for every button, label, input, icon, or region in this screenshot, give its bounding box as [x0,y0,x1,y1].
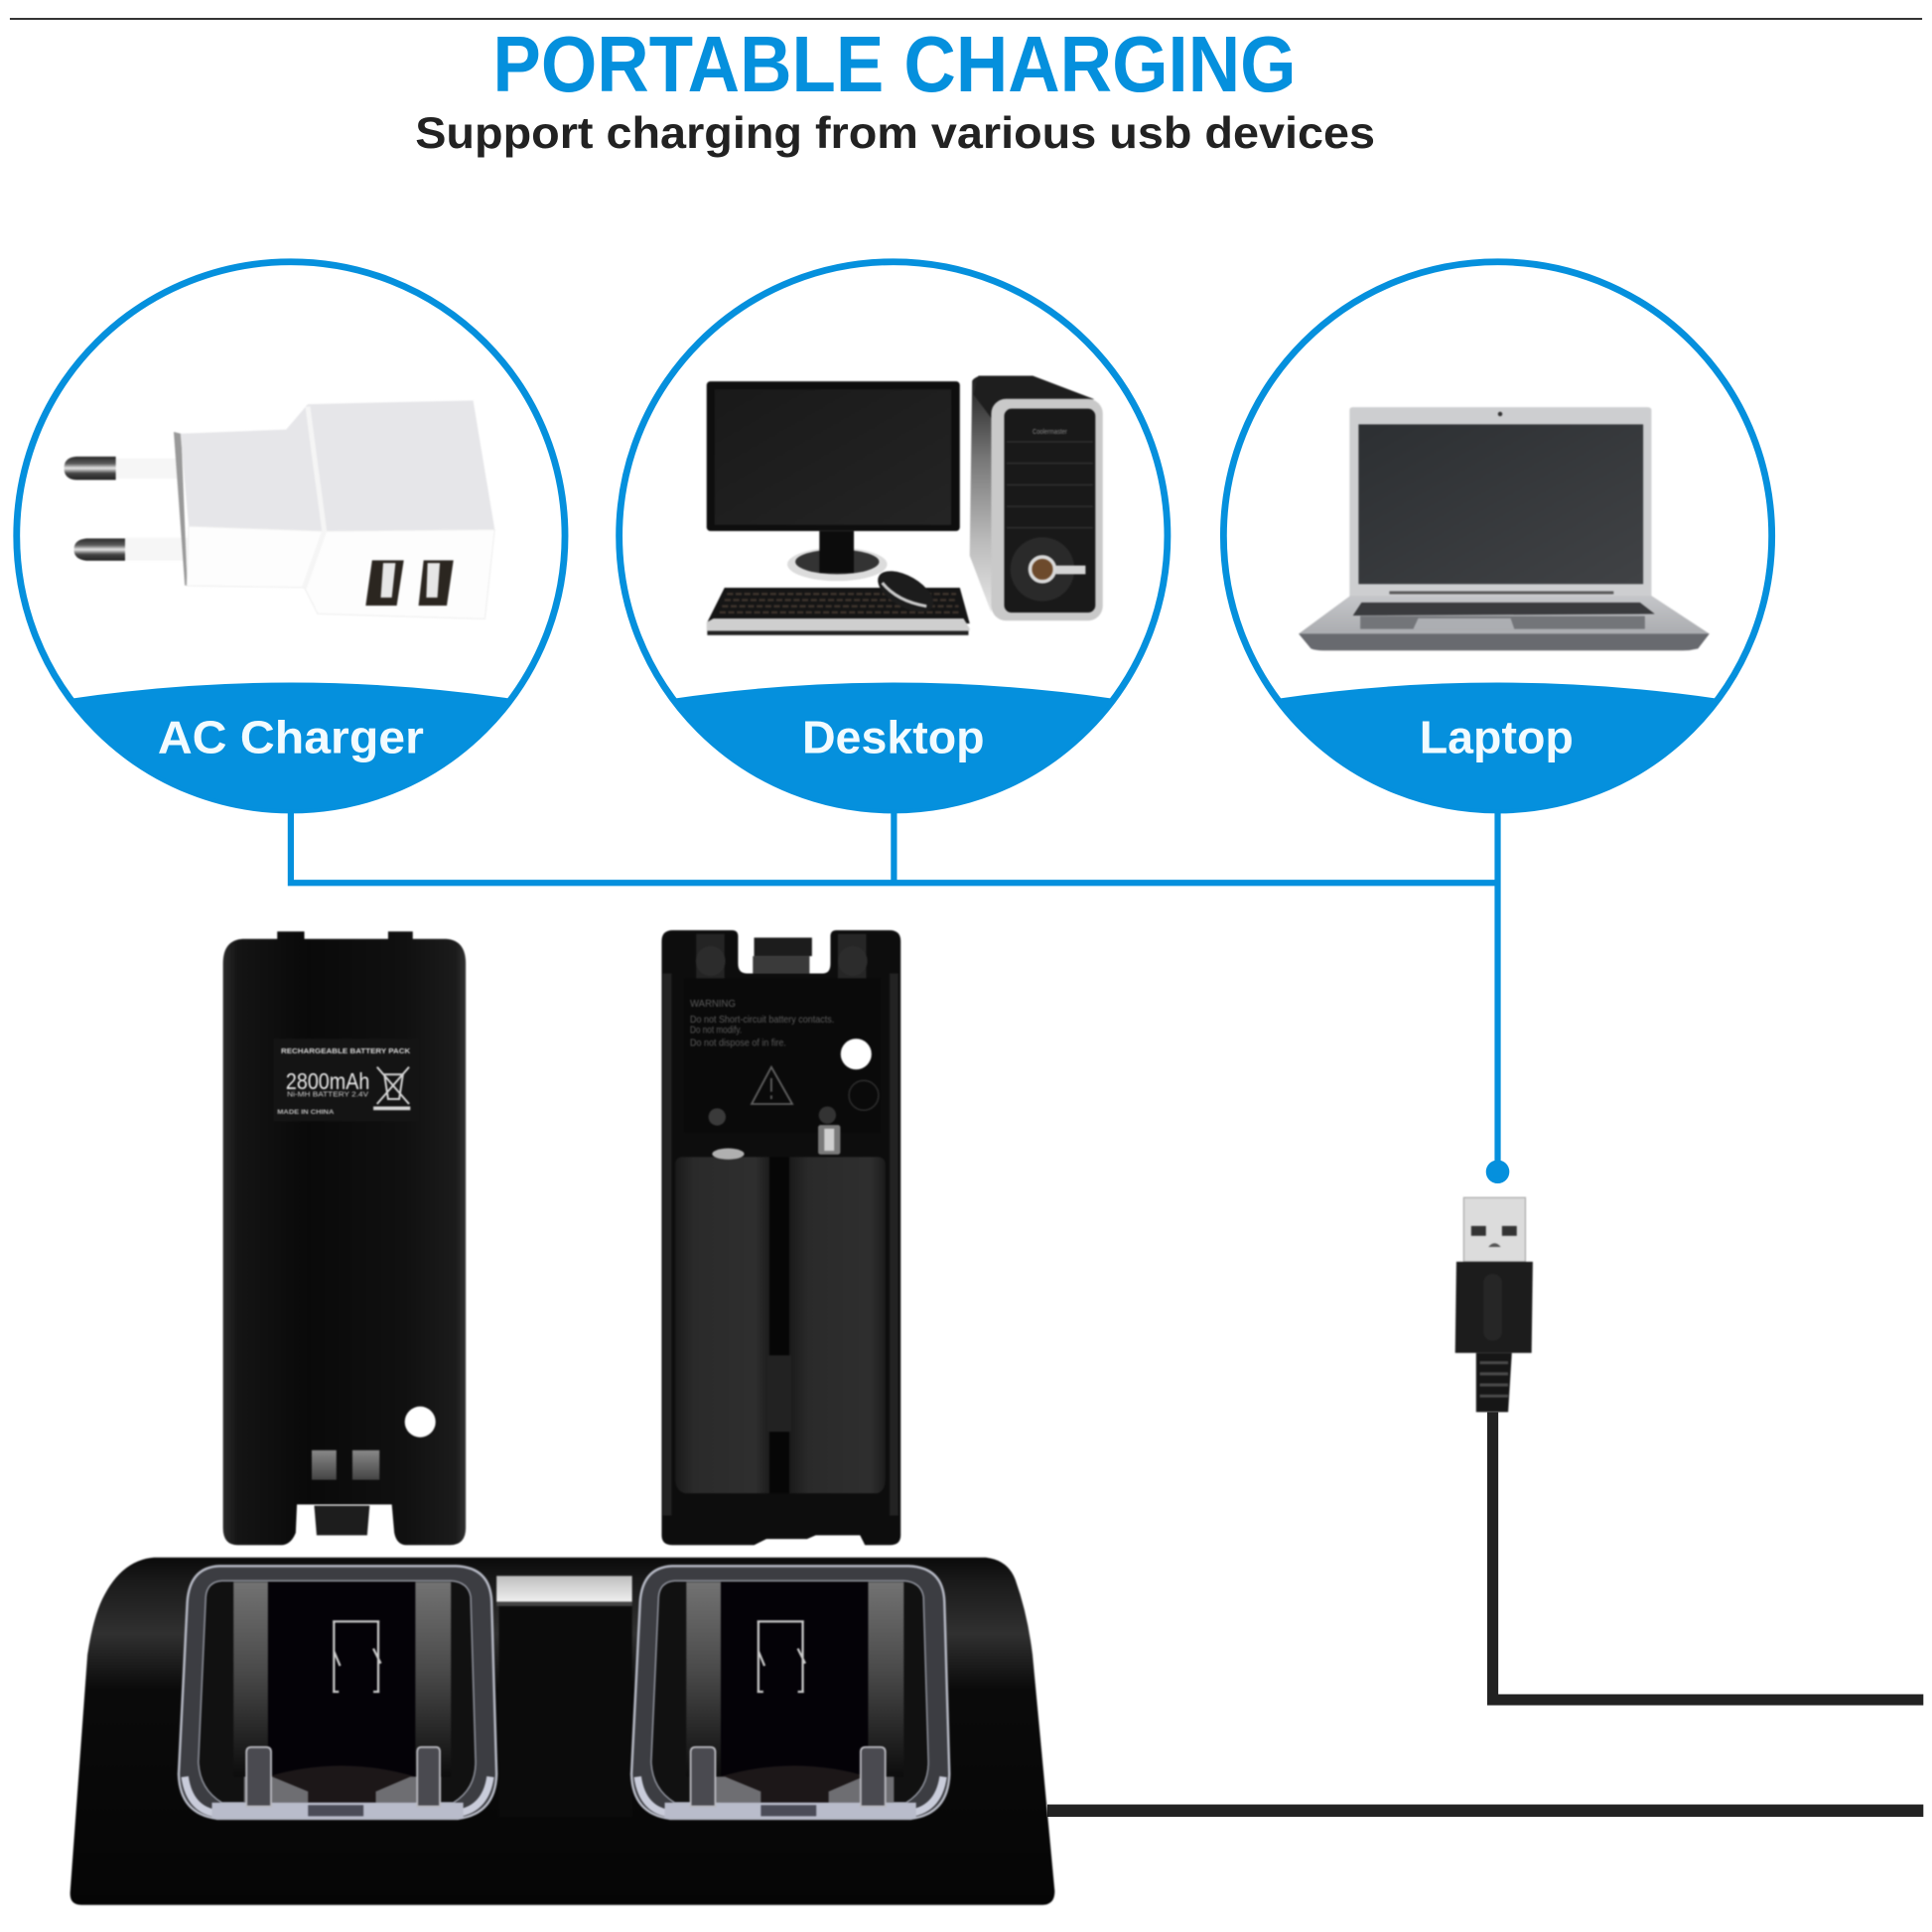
icon: warning triangle [752,1067,792,1104]
icon: desktop computer: Coolermaster [1033,427,1067,436]
battery pack: back: MADE IN CHINA [277,1109,334,1116]
dock body [70,1558,1054,1905]
battery pack: back: RECHARGEABLE BATTERY PACK [281,1046,411,1055]
panel: desktop [620,262,1168,810]
label band: laptop [1278,683,1718,809]
USB plug [1455,1197,1533,1412]
USB metal shell [1463,1197,1525,1262]
label band: desktop [673,683,1113,809]
right clear cradle [631,1566,949,1819]
battery latch [755,937,812,956]
battery pack: inside [661,930,900,1545]
warning text: WARNING [690,999,736,1010]
battery pack: back: 2800mAh [286,1068,369,1094]
label band: AC charger [70,683,510,809]
warning text [690,999,834,1049]
icon: crossed-out bin [373,1067,410,1110]
charging dock [70,1558,1054,1905]
title: PORTABLE CHARGING [492,20,1297,108]
subtitle: Support charging from various usb devices [415,109,1375,158]
warning text: Do not Short-circuit battery contacts. [690,1015,834,1026]
warning text: Do not dispose of in fire. [690,1038,786,1049]
battery pack: back: Ni-MH BATTERY 2.4V [287,1090,368,1099]
battery body [223,931,466,1545]
icon: laptop [1299,407,1710,650]
battery pack: back [223,931,466,1545]
center bay [499,1605,632,1818]
panel: laptop [1223,262,1772,810]
USB moulded body [1455,1262,1533,1353]
label: Desktop: Desktop [802,711,985,762]
cable from dock [1047,1805,1923,1817]
panel: AC charger [17,262,565,810]
charging contacts [312,1450,337,1480]
left clear cradle [179,1566,496,1819]
top rule [10,18,1922,20]
connector lines [291,808,1506,1180]
battery label [274,1038,419,1121]
label: AC Charger: AC Charger [158,711,424,762]
cover body [661,930,900,1545]
polarity marks [709,1108,726,1126]
indicator hole [849,1080,879,1110]
icon: desktop computer [707,376,1103,635]
indicator hole [405,1407,436,1438]
battery cells [675,1157,769,1493]
cable from USB plug [1493,1412,1923,1700]
label: Laptop: Laptop [1420,711,1574,762]
icon: wall charger [65,400,494,619]
USB strain relief [1476,1353,1512,1412]
warning text: Do not modify. [690,1026,742,1036]
